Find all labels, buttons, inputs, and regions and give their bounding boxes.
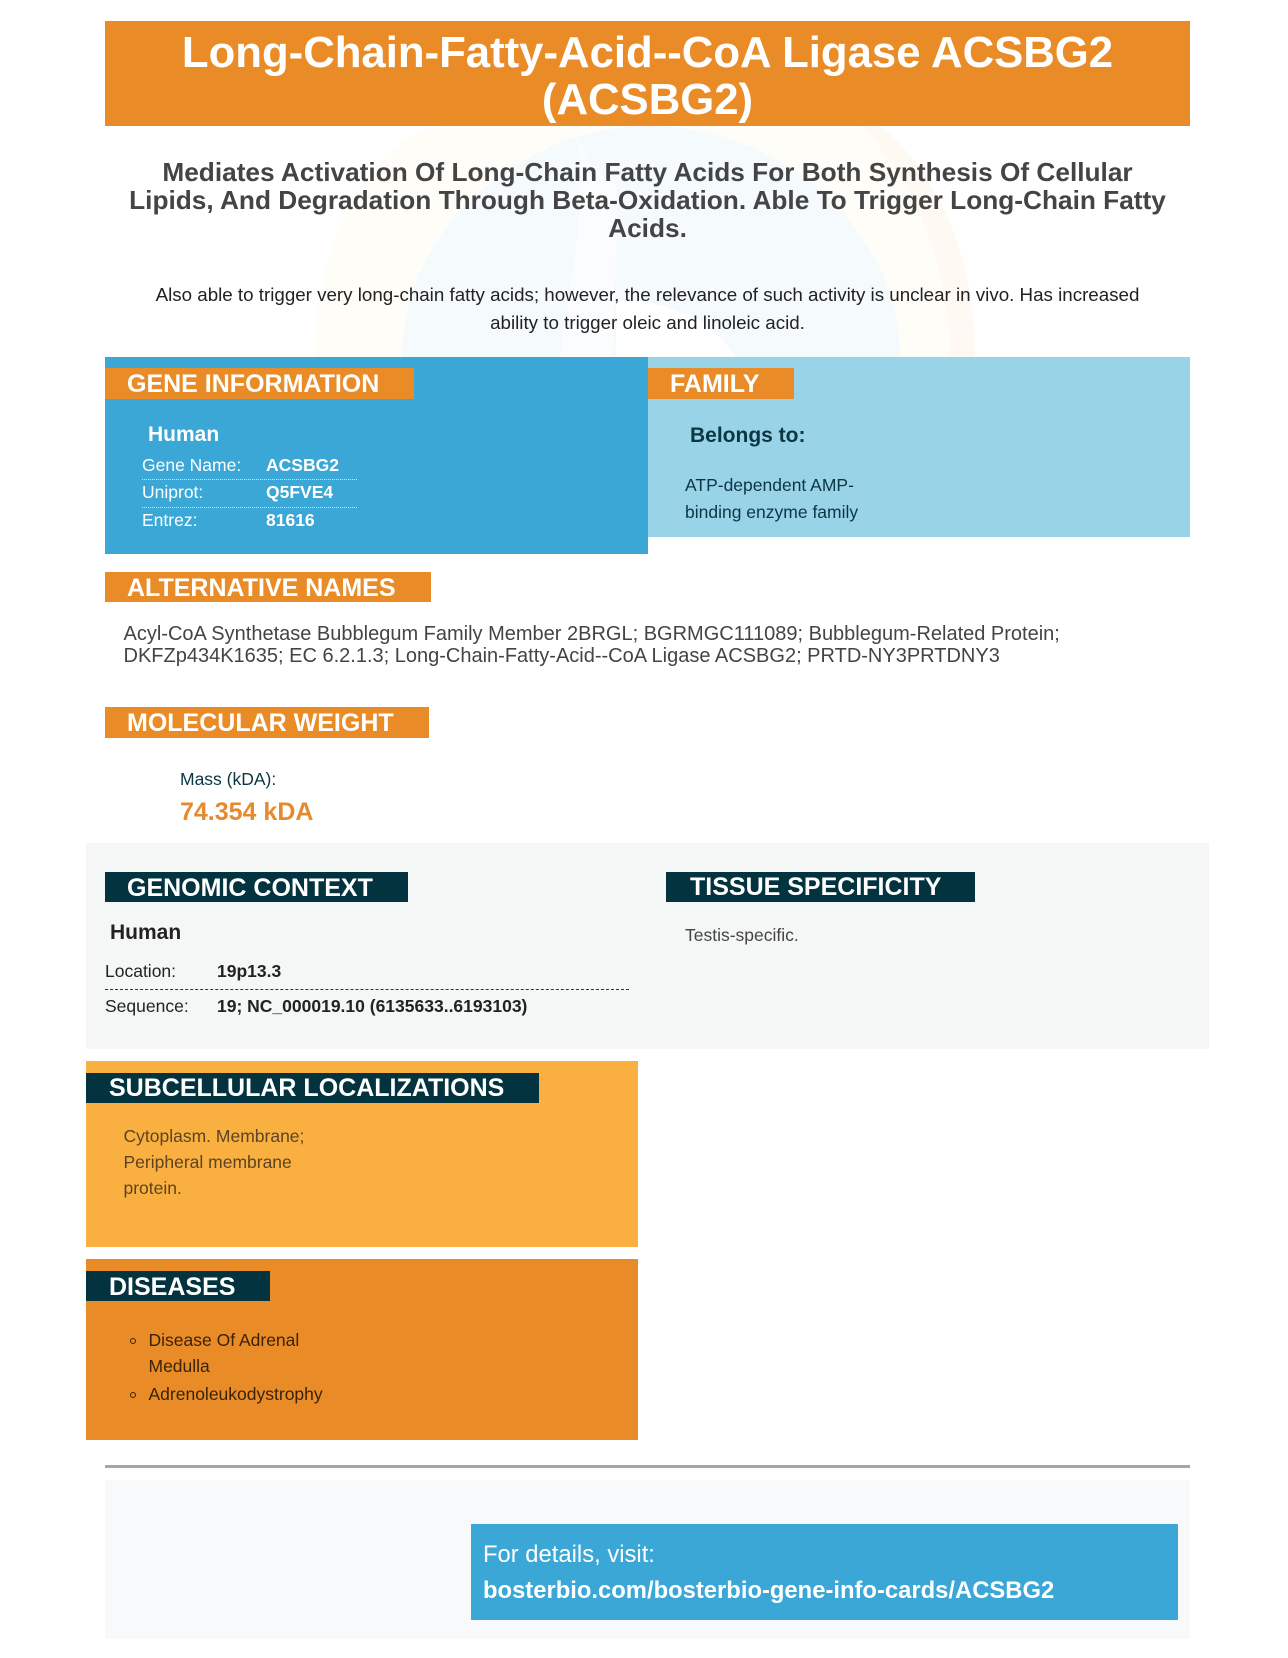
intro paragraph: Also able to trigger very long-chain fatty acids; however, the relevance of such activity is unclear in vivo. Has increased: [156, 284, 1139, 304]
heading: tissue specificity: TISSUE SPECIFICITY: [690, 873, 941, 901]
location row: Location:: [105, 961, 176, 981]
uniprot row: Uniprot:: [142, 482, 203, 502]
family name: [685, 475, 858, 522]
tissue text: Testis-specific.: [685, 925, 799, 945]
panel: diseases: [86, 1259, 638, 1440]
panel: gene information: [105, 357, 648, 554]
heading: subcellular localizations: SUBCELLULAR LOCALIZATIONS: [109, 1074, 504, 1102]
panel: genomic context and tissue specificity: [86, 843, 1209, 1049]
heading: diseases: [86, 1271, 270, 1301]
watermark logo: [402, 126, 975, 357]
panel: family: [648, 357, 1190, 537]
intro paragraph: [156, 284, 1139, 333]
uniprot row: Q5FVE4: [266, 482, 333, 502]
mass value: 74.354 kDA: [180, 798, 313, 826]
call to action: [471, 1524, 1178, 1620]
gene name row: Gene Name:: [142, 455, 241, 475]
entrez row: Entrez:: [142, 510, 197, 530]
title line 1: Long-Chain-Fatty-Acid--CoA Ligase ACSBG2: [182, 28, 1113, 77]
heading: alternative names: ALTERNATIVE NAMES: [127, 574, 396, 602]
family name: binding enzyme family: [685, 502, 858, 522]
localization text: Cytoplasm. Membrane;: [124, 1126, 304, 1146]
uniprot row: [142, 480, 357, 508]
disease list: Medulla: [148, 1356, 210, 1376]
localization text: Peripheral membrane: [124, 1152, 292, 1172]
call to action: bosterbio.com/bosterbio-gene-info-cards/ACSBG2: [483, 1577, 1054, 1604]
sequence row: 19; NC_000019.10 (6135633..6193103): [217, 996, 527, 1016]
species label: Human: [110, 921, 181, 944]
heading: molecular weight: MOLECULAR WEIGHT: [127, 709, 394, 737]
footer panel: [105, 1480, 1190, 1639]
call to action: For details, visit:: [483, 1541, 655, 1568]
panel: subcellular localizations: [86, 1061, 638, 1247]
mass value: Mass (kDA):: [180, 769, 276, 789]
intro paragraph: ability to trigger oleic and linoleic acid.: [490, 312, 805, 333]
subtitle heading: Lipids, And Degradation Through Beta-Oxidation. Able To Trigger Long-Chain Fatty: [129, 185, 1166, 215]
title banner: [105, 21, 1190, 126]
heading: gene information: GENE INFORMATION: [127, 370, 379, 398]
species label: Human: [148, 423, 219, 446]
localization text: protein.: [124, 1178, 182, 1198]
gene name row: ACSBG2: [266, 455, 339, 475]
entrez row: 81616: [266, 510, 315, 530]
heading: diseases: DISEASES: [109, 1273, 235, 1301]
location row: 19p13.3: [217, 961, 281, 981]
heading: family: [648, 368, 794, 399]
localization text: [124, 1126, 304, 1198]
mass value: [180, 769, 313, 826]
subtitle heading: [129, 157, 1166, 243]
disease list: Disease Of Adrenal: [148, 1330, 299, 1350]
alternative names text: Acyl-CoA Synthetase Bubblegum Family Member 2BRGL; BGRMGC111089; Bubblegum-Related Protein;: [124, 623, 1060, 645]
family name: ATP-dependent AMP-: [685, 475, 854, 495]
subtitle heading: Acids.: [608, 213, 687, 243]
heading: genomic context: GENOMIC CONTEXT: [127, 874, 373, 902]
alternative names text: [124, 623, 1060, 667]
title line 2: (ACSBG2): [542, 75, 753, 124]
alternative names text: DKFZp434K1635; EC 6.2.1.3; Long-Chain-Fatty-Acid--CoA Ligase ACSBG2; PRTD-NY3PRTDNY3: [124, 645, 1000, 667]
location row: [105, 954, 629, 990]
entrez row: [142, 510, 315, 530]
disease list: Adrenoleukodystrophy: [148, 1384, 323, 1404]
belongs to label: Belongs to:: [690, 424, 806, 447]
disease list: [130, 1330, 323, 1404]
gene name row: [142, 452, 357, 480]
footer rule: [105, 1465, 1190, 1468]
heading: family: FAMILY: [670, 370, 759, 398]
subtitle heading: Mediates Activation Of Long-Chain Fatty Acids For Both Synthesis Of Cellular: [162, 157, 1133, 187]
sequence row: Sequence:: [105, 996, 189, 1016]
